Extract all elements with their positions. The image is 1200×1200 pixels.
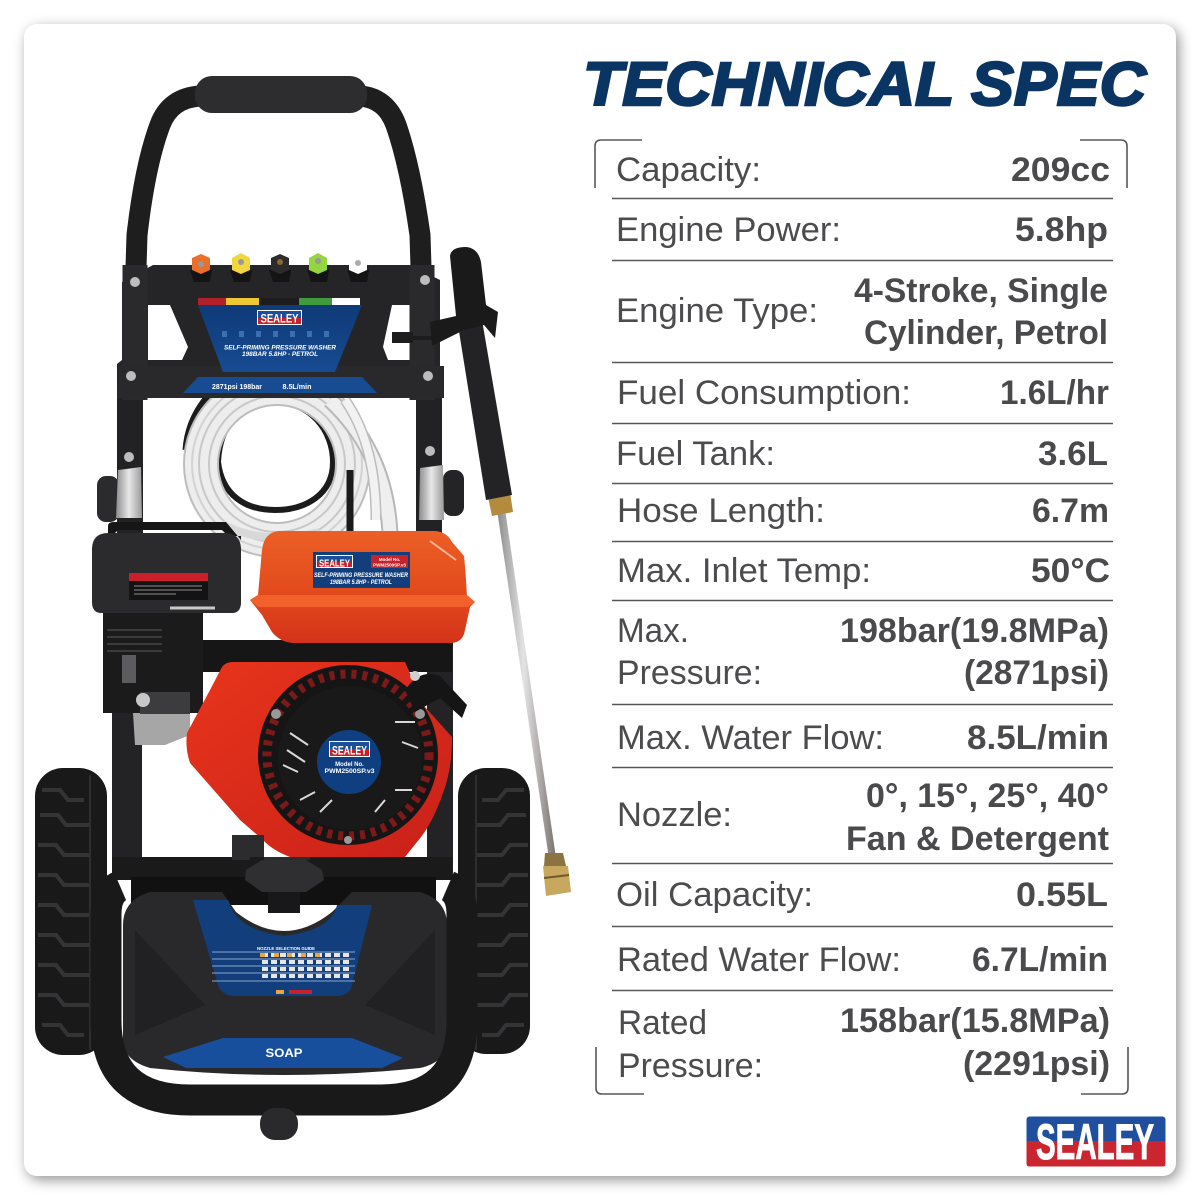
panel: tank label: PWM2500SP.v3	[373, 562, 406, 568]
row: max water flow: 8.5L/min	[967, 719, 1109, 757]
panel: specification strip: 8.5L/min	[282, 384, 312, 391]
base U-shaped tube	[106, 886, 462, 1100]
row: engine power	[616, 211, 1108, 249]
panel: soap strip: SOAP	[266, 1046, 302, 1060]
row: rated pressure: 158bar(15.8MPa)	[840, 1002, 1110, 1040]
row: max pressure: 198bar(19.8MPa)	[840, 612, 1109, 650]
soap tank	[123, 892, 447, 1075]
panel: specification strip	[183, 377, 377, 393]
row: fuel consumption	[617, 374, 1109, 412]
lance handle	[458, 320, 512, 500]
row: oil capacity: 0.55L	[1016, 876, 1108, 914]
icon: green nozzle	[309, 253, 327, 274]
row: capacity: 209cc	[1011, 151, 1110, 189]
row: max water flow	[617, 719, 1109, 757]
specification table	[612, 151, 1113, 1085]
row: fuel tank: 3.6L	[1038, 435, 1108, 473]
panel: tank label: SELF-PRIMING PRESSURE WASHER	[314, 573, 409, 579]
row: engine type	[616, 272, 1108, 352]
metal brackets and knobs	[97, 332, 464, 522]
hand grip	[195, 76, 367, 113]
red engine shroud	[186, 662, 452, 857]
row: fuel tank	[616, 435, 1108, 473]
row: capacity: Capacity:	[616, 151, 761, 189]
row: oil capacity: Oil Capacity:	[616, 876, 813, 914]
panel: nozzle selection guide: NOZZLE SELECTION GUIDE	[257, 946, 315, 951]
row: fuel tank: Fuel Tank:	[616, 435, 775, 473]
handle frame tubes	[127, 96, 440, 880]
panel: nozzle selection guide	[193, 900, 372, 996]
spray nozzle holders	[190, 253, 369, 282]
row: engine power: Engine Power:	[616, 211, 841, 249]
panel: soap strip	[163, 1038, 403, 1068]
row: rated pressure	[618, 1002, 1110, 1085]
metal lance	[497, 509, 556, 859]
panel: tank label	[313, 552, 410, 588]
row: nozzle: Fan & Detergent	[846, 820, 1109, 858]
row: max water flow: Max. Water Flow:	[617, 719, 884, 757]
row: max pressure: Max.	[617, 612, 689, 650]
panel: tank label: Model No.	[379, 557, 400, 562]
fuel tank	[250, 531, 475, 643]
icon: right wheel	[458, 768, 530, 1054]
row: hose length: 6.7m	[1032, 492, 1109, 530]
row: rated pressure: (2291psi)	[963, 1045, 1110, 1083]
logo: small sealey badge: SEALEY	[260, 312, 298, 326]
row: capacity	[616, 151, 1110, 189]
model badge: PWM2500SP.v3	[324, 768, 375, 775]
upper bracket plate	[117, 265, 444, 400]
row: max inlet temp	[617, 552, 1110, 590]
spray gun and lance	[430, 247, 571, 896]
row: fuel consumption: Fuel Consumption:	[617, 374, 911, 412]
engine block	[103, 613, 452, 745]
row: nozzle: 0°, 15°, 25°, 40°	[866, 777, 1109, 815]
row: rated pressure: Rated	[618, 1004, 707, 1042]
icon: orange nozzle	[192, 254, 210, 274]
model badge: Model No.	[335, 762, 364, 768]
icon: black nozzle	[271, 254, 289, 274]
row: fuel consumption: 1.6L/hr	[1000, 374, 1109, 412]
model badge: SEALEY	[332, 744, 367, 758]
table corner brackets	[595, 140, 1128, 1094]
panel: washer control label: 198BAR 5.8HP - PETROL	[242, 351, 318, 358]
title: TECHNICAL SPEC	[583, 50, 1147, 118]
recoil starter cover	[258, 665, 467, 845]
row: hose length: Hose Length:	[617, 492, 825, 530]
icon: yellow nozzle	[232, 253, 250, 274]
row: engine type: 4-Stroke, Single	[854, 272, 1108, 310]
row: rated water flow: 6.7L/min	[972, 941, 1108, 979]
panel: washer control label	[198, 298, 362, 372]
icon: white nozzle	[349, 258, 367, 274]
row: max pressure	[617, 612, 1109, 692]
row: engine power: 5.8hp	[1015, 211, 1108, 249]
air filter cover	[92, 522, 241, 613]
row: rated water flow	[617, 941, 1108, 979]
row: oil capacity	[616, 876, 1108, 914]
row: max inlet temp: 50°C	[1031, 552, 1110, 590]
icon: coiled hose	[187, 372, 390, 549]
row: rated water flow: Rated Water Flow:	[617, 941, 901, 979]
icon: left wheel	[35, 768, 107, 1055]
icon: brass collar	[488, 492, 513, 516]
illustration: pressure washer	[35, 76, 571, 1140]
row: nozzle: Nozzle:	[617, 796, 732, 834]
panel: washer control label: SELF-PRIMING PRESSURE WASHER	[224, 344, 336, 352]
row: max pressure: (2871psi)	[964, 654, 1109, 692]
soap tank cap	[245, 860, 324, 913]
row: engine type: Cylinder, Petrol	[864, 314, 1108, 352]
panel: specification strip: 2871psi 198bar	[212, 384, 262, 391]
row: max inlet temp: Max. Inlet Temp:	[617, 552, 871, 590]
row: nozzle	[617, 777, 1109, 858]
model badge	[317, 730, 381, 794]
row: engine type: Engine Type:	[616, 292, 818, 330]
icon: brass coupling	[543, 853, 571, 896]
panel: tank label: 198BAR 5.8HP - PETROL	[330, 580, 392, 586]
row: hose length	[617, 492, 1109, 530]
row: rated pressure: Pressure:	[618, 1047, 763, 1085]
trigger gun body	[430, 247, 498, 346]
row: max pressure: Pressure:	[617, 654, 762, 692]
base plate	[112, 835, 452, 905]
panel: tank label: SEALEY	[319, 558, 350, 570]
rear foot	[260, 1108, 298, 1140]
